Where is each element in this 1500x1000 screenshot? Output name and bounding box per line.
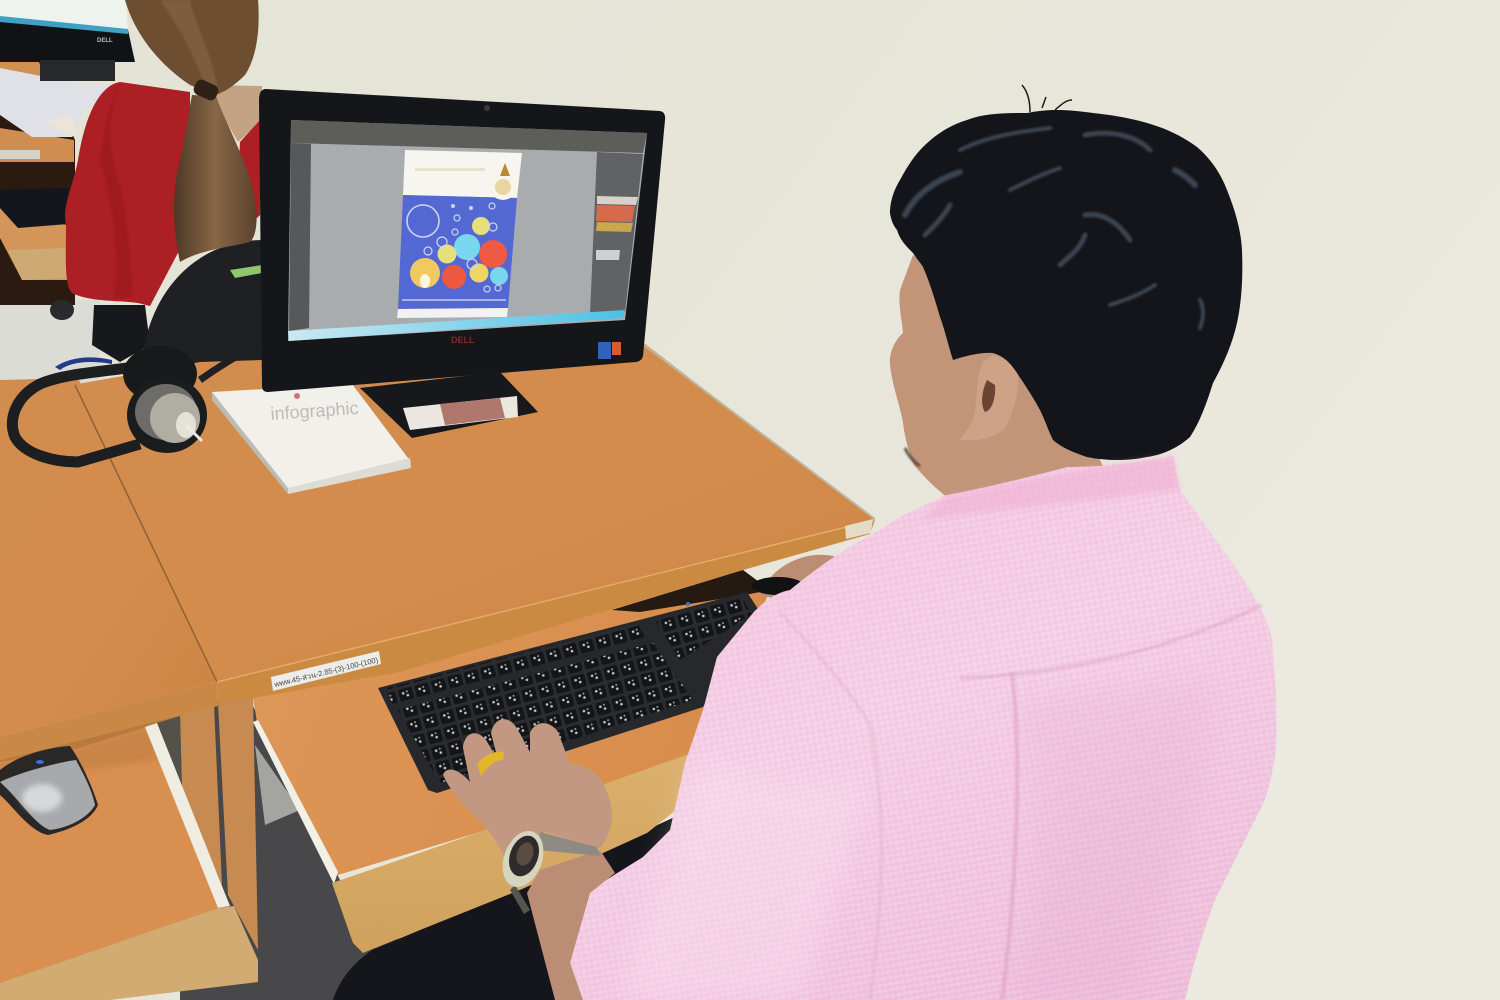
keyboard tray — [253, 570, 770, 875]
left drawer surface — [0, 727, 218, 983]
mouse — [0, 746, 98, 835]
left drawer lip — [0, 906, 258, 1000]
monitor: DELL — [451, 335, 475, 345]
monitor screen — [288, 120, 647, 341]
tray front lip — [332, 750, 700, 953]
typing hand — [443, 719, 612, 858]
floor — [0, 300, 100, 385]
swatches panel — [596, 196, 638, 260]
hair highlights — [905, 128, 1203, 328]
under-desk floor — [180, 700, 400, 1000]
ear — [960, 355, 1018, 440]
hair — [890, 85, 1242, 460]
headphones — [12, 342, 262, 462]
far desk — [0, 60, 75, 305]
book: infographic — [270, 398, 359, 424]
ponytail — [174, 95, 257, 262]
artwork circles — [402, 203, 508, 301]
forearm — [527, 850, 615, 1000]
collar band — [920, 456, 1180, 520]
colleague head hair — [125, 0, 259, 95]
far keyboard — [0, 188, 68, 228]
shirt folds — [960, 605, 1262, 678]
colleague red blouse — [65, 82, 190, 306]
main desk leg — [218, 696, 258, 950]
main desk front edge — [217, 520, 875, 703]
second monitor: DELL — [97, 38, 113, 44]
papers — [0, 68, 150, 137]
book — [212, 384, 411, 494]
left desk front and side — [0, 682, 258, 1000]
colleague trousers — [92, 305, 150, 362]
pink shirt — [570, 456, 1276, 1000]
monitor — [259, 89, 665, 392]
beard shadow — [905, 448, 920, 466]
main desk top — [72, 340, 875, 682]
left desk top — [0, 378, 217, 737]
colleague skin — [205, 85, 262, 142]
monitor stand — [360, 372, 538, 438]
second monitor — [0, 0, 135, 81]
artwork poster — [403, 150, 522, 198]
background desk and colleague — [0, 0, 262, 385]
desk label: www.45-ส่วน-2.85-(3)-100-(100) — [272, 655, 379, 689]
wristwatch — [495, 825, 600, 914]
man head skin — [890, 255, 1110, 497]
far tray — [0, 205, 70, 280]
mouse hand behind shirt — [760, 555, 848, 605]
ring — [477, 752, 504, 776]
office chair — [143, 240, 262, 365]
keyboard — [378, 592, 760, 793]
trousers — [333, 810, 700, 1000]
